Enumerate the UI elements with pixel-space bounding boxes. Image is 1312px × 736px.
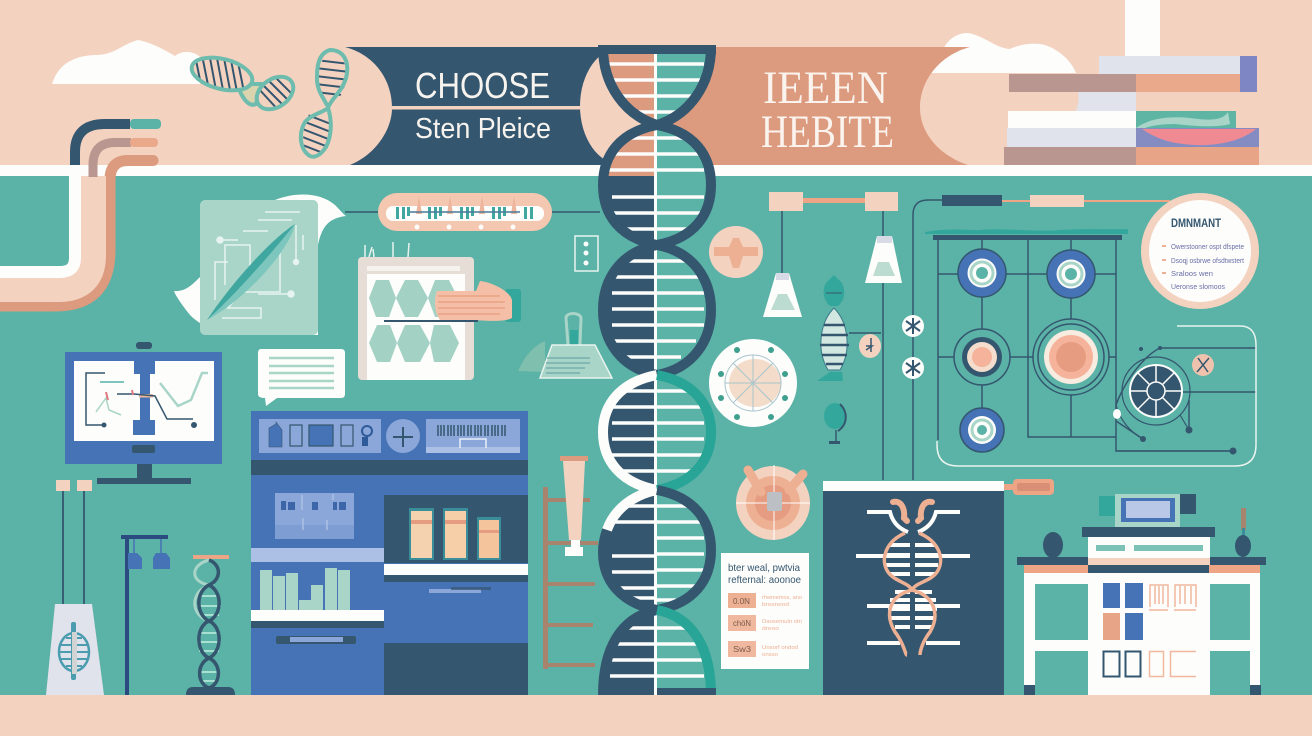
book stack <box>1004 56 1259 165</box>
hanging flasks <box>763 192 902 480</box>
model rungs <box>197 596 221 681</box>
capsule: gene sequence <box>378 193 552 231</box>
pipe: peach middle <box>0 176 93 289</box>
paper swoosh <box>174 195 346 335</box>
rounded white frame <box>937 326 1256 466</box>
helix right strand: teal <box>657 375 711 490</box>
note card: 0.0N <box>733 597 750 606</box>
I-shaped marker <box>133 361 155 435</box>
ring node peach <box>954 329 1010 385</box>
dark lower door <box>384 643 528 695</box>
small bottle panel <box>275 493 354 539</box>
small DNA model <box>186 555 235 695</box>
note card: chöN <box>733 619 751 628</box>
caduceus strands <box>884 533 912 655</box>
flask left <box>763 273 802 317</box>
book pink crescent <box>1142 129 1256 145</box>
cloud: left <box>52 40 203 84</box>
right shelf <box>384 564 528 575</box>
flask right <box>865 236 902 283</box>
background: teal field <box>0 176 1312 695</box>
heading: CHOOSE: CHOOSE <box>415 65 550 106</box>
cabinet plus button <box>386 419 420 453</box>
cabinet top left panel <box>259 419 381 453</box>
white bars <box>856 512 970 643</box>
desk device <box>1099 494 1196 527</box>
connector lines: capsule <box>345 211 600 213</box>
pipe: mauve and orange <box>93 142 131 177</box>
icon: small DNA left <box>190 56 296 112</box>
peach notch beside DNA <box>580 47 664 165</box>
helix right strand: navy lower <box>657 490 711 610</box>
note card: Unsorf ondod <box>762 645 798 651</box>
panel: blueprint paper <box>174 195 346 335</box>
oval bullets <box>1162 245 1166 274</box>
helix right strand: teal lower <box>657 610 711 695</box>
gear wheel diagram <box>1113 346 1236 454</box>
lab stand with DNA tag <box>46 480 104 695</box>
helix right strand: navy upper <box>657 47 711 375</box>
note card: brosneod <box>762 602 789 608</box>
ruler line <box>384 320 478 322</box>
hand <box>505 289 521 322</box>
oval legend: Owerstooner ospt dfspete <box>1171 244 1244 251</box>
oval legend: Dsoqj osbrwe ofsdtwstert <box>1171 258 1244 265</box>
drawer handle <box>276 636 356 644</box>
pipe: navy and teal top <box>75 124 130 165</box>
oval title: DMNMANT <box>1171 216 1222 230</box>
diagonal leaf <box>207 224 295 320</box>
hexagons <box>369 280 459 362</box>
note row 2 <box>728 615 756 631</box>
oval legend: Ueronse slomoos <box>1171 284 1225 291</box>
cabinet barcode panel <box>426 419 520 453</box>
note card: refternal: aoonoe <box>728 574 801 586</box>
helix left strand: navy upper <box>603 47 657 375</box>
book swoosh <box>1136 112 1230 128</box>
blue eye node 3 <box>960 408 1004 452</box>
desk knob right <box>1235 508 1251 557</box>
note card <box>721 553 809 669</box>
desk knob left <box>1043 532 1063 558</box>
helix left strand: navy lower <box>603 530 657 695</box>
blue eye node 1 <box>958 249 1006 297</box>
oval legend <box>1141 193 1259 309</box>
model pale backing <box>195 560 209 621</box>
target circle <box>736 465 810 540</box>
grid wires <box>938 240 1256 451</box>
helix bottom cap <box>657 688 716 695</box>
note card: Sw3 <box>733 645 752 654</box>
helix right fill <box>657 54 706 678</box>
banner divider <box>392 106 582 110</box>
pipes: top-left flowing bands <box>0 119 161 306</box>
blue eye node 2 <box>1047 250 1095 298</box>
helix left strand: white <box>603 375 657 530</box>
desk legs <box>1024 685 1035 695</box>
desk colour blocks <box>1103 583 1120 608</box>
pen marks <box>365 242 409 257</box>
circuit grid <box>925 229 1256 452</box>
blue cabinet <box>251 411 528 695</box>
bar chart <box>260 568 350 611</box>
icon: peach plus circle <box>709 226 763 278</box>
desk frame <box>1024 573 1260 695</box>
lab desk <box>1017 494 1266 695</box>
large ring node <box>1033 319 1109 395</box>
helix left fill <box>606 54 657 695</box>
central double helix <box>598 45 716 695</box>
chart traces <box>86 373 208 428</box>
floor strip <box>0 695 1312 736</box>
ladder with tube <box>543 456 598 669</box>
small peach node <box>859 334 881 358</box>
tubes <box>409 508 501 560</box>
note card: Daosemuln otn <box>762 619 802 625</box>
cabinet dark band <box>251 460 528 475</box>
model strands <box>199 560 218 688</box>
grid connector <box>913 200 942 480</box>
heading: IEEEN: IEEEN <box>763 62 888 114</box>
IV stand <box>121 535 170 695</box>
icon: small DNA right <box>299 50 350 158</box>
capsule bars <box>396 207 533 219</box>
vertical small DNA <box>817 275 881 381</box>
top grid rail <box>942 195 1170 207</box>
dark alcove <box>384 495 528 563</box>
note card: onsso <box>762 652 778 658</box>
note card: dreoo <box>762 626 779 632</box>
desk window cutouts <box>1035 584 1250 695</box>
icon: central flask <box>518 314 612 378</box>
pipe: salmon outer <box>0 160 153 306</box>
poster tab <box>1004 484 1014 490</box>
helix top cap <box>598 45 716 54</box>
note row 1 <box>728 593 756 608</box>
connector <box>238 84 262 105</box>
asterisk node upper <box>902 315 924 337</box>
desk navy outlines <box>1104 652 1120 676</box>
DNA tag icon <box>59 633 89 671</box>
heading: HEBITE: HEBITE <box>761 106 894 158</box>
rosette circle <box>709 339 797 427</box>
desk tops <box>1017 557 1088 565</box>
light band <box>251 548 384 562</box>
monitor with chart <box>65 342 222 484</box>
blueprint lines <box>215 212 303 318</box>
banner: navy left <box>345 47 610 165</box>
banner: salmon right <box>657 47 970 165</box>
note title: bter weal, pwtvia <box>728 562 800 574</box>
navy poster with caduceus DNA <box>823 479 1054 695</box>
capsule pins <box>416 196 517 214</box>
icon: small globe <box>824 403 846 444</box>
desk peach glyphs <box>1149 585 1196 676</box>
icon: wall outlet <box>575 236 598 271</box>
white chimney column <box>1125 0 1160 57</box>
speech bubble <box>258 349 345 406</box>
right drawer pull <box>429 589 481 593</box>
white divider band <box>0 165 1312 176</box>
asterisk node lower <box>902 357 924 379</box>
pipe: white inner <box>0 176 75 272</box>
note card: rhwmemos, ano <box>762 595 802 601</box>
cloud: right <box>932 33 1076 73</box>
note row 3 <box>728 641 756 657</box>
peach cross pin <box>1192 354 1214 376</box>
monitor knob <box>136 342 152 349</box>
oval legend: Sraloos wen <box>1171 271 1213 278</box>
shelf <box>251 610 384 621</box>
subheading: Sten Pleice: Sten Pleice <box>415 113 551 145</box>
panel: hexagon sheet with hand <box>358 242 521 380</box>
inner rungs <box>886 545 938 627</box>
